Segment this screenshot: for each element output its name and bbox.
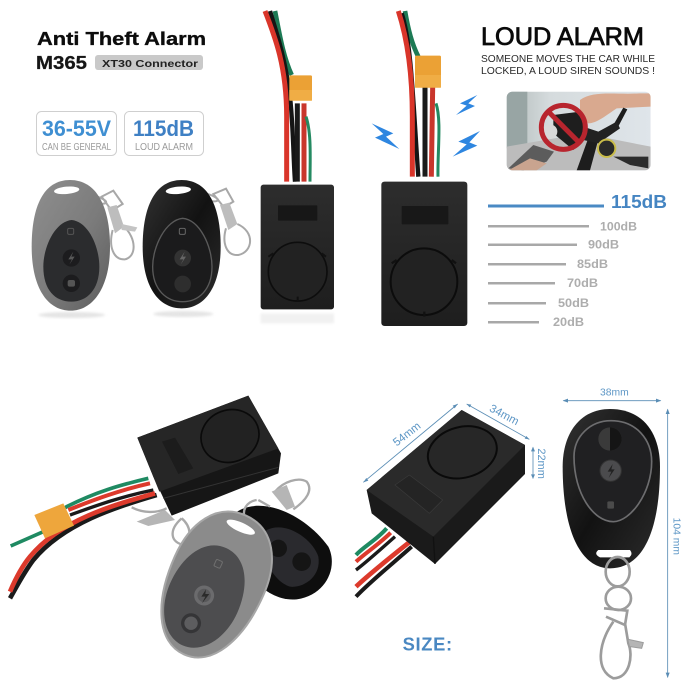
text block: alarm description: [481, 53, 655, 77]
chart: decibel comparison: [488, 192, 667, 329]
photo: scooter with prohibition sign: [507, 92, 651, 170]
icon: black key fob: [143, 180, 250, 317]
wires: [398, 11, 439, 177]
panel: top-left product intro: [32, 28, 250, 318]
text block: alarm description: LOCKED, A LOUD SIREN SOUNDS !: [481, 65, 655, 77]
bar: 100dB: 100dB: [600, 220, 637, 234]
dimension: 54mm: 54mm: [391, 420, 423, 449]
heading: size: SIZE:: [403, 634, 453, 655]
XT30 connector: [415, 56, 441, 88]
bar: 20dB: 20dB: [553, 315, 584, 329]
bar: 70dB: [488, 276, 598, 290]
wires: [356, 528, 412, 597]
panel: alarm unit with wires (left): [261, 11, 334, 323]
icon: lightning bolt top: [456, 95, 477, 115]
text block: alarm description: SOMEONE MOVES THE CAR WHILE: [481, 53, 655, 65]
dimension: 34mm: 34mm: [487, 403, 521, 428]
badge: loudness: LOUD ALARM: [135, 142, 193, 153]
bar: 85dB: 85dB: [577, 257, 608, 271]
bar: 115dB: [488, 192, 667, 212]
icon: black key fob with dimensions: [563, 409, 660, 568]
dimension: 104 mm: [666, 409, 681, 678]
bar: 90dB: [488, 238, 619, 252]
dimension: 104 mm: 104 mm: [670, 518, 681, 555]
bar: 50dB: 50dB: [558, 296, 589, 310]
bar: 20dB: [488, 315, 584, 329]
heading: loud alarm: LOUD ALARM: [481, 23, 644, 51]
icon: black fob behind: [226, 506, 332, 600]
dimension: 54mm: [363, 404, 458, 482]
bar: 70dB: 70dB: [567, 276, 598, 290]
alarm box: [261, 185, 334, 323]
wires: [265, 11, 310, 182]
XT30 connector: [289, 75, 312, 101]
bar: 115dB: 115dB: [611, 192, 667, 212]
title: Anti Theft Alarm: [37, 28, 206, 49]
panel: loud alarm unit with wires (right): [372, 11, 480, 326]
dimension: 38mm: 38mm: [600, 387, 629, 398]
icon: clasps: [132, 480, 309, 545]
bar: 50dB: [488, 296, 589, 310]
model name: M365: [36, 52, 87, 73]
icon: gray key fob: [32, 180, 137, 318]
panel: size diagram: [356, 387, 681, 678]
XT30 connector: [34, 503, 74, 538]
icon: lightning bolt left: [372, 123, 399, 149]
icon: gray fob front: [140, 496, 290, 674]
bar: 85dB: [488, 257, 608, 271]
wires: [10, 478, 157, 598]
dimension: 34mm: [467, 403, 529, 439]
icon: key ring and clasp: [601, 557, 643, 678]
badge: loudness: 115dB: [133, 116, 194, 141]
panel: product group photo: [10, 396, 332, 674]
dimension: 22mm: 22mm: [535, 448, 547, 479]
icon: lightning bolt bottom: [453, 131, 480, 157]
badge: voltage: [36, 112, 116, 156]
badge: voltage: CAN BE GENERAL: [42, 142, 111, 153]
badge: voltage: 36-55V: [42, 116, 111, 141]
alarm box: [137, 396, 281, 516]
alarm box: [367, 410, 525, 564]
connector tag: XT30 Connector: [102, 58, 198, 70]
dimension: 38mm: [563, 387, 661, 403]
badge: loudness: [124, 112, 204, 156]
alarm box: [381, 182, 467, 326]
connector tag: [95, 55, 203, 70]
bar: 90dB: 90dB: [588, 238, 619, 252]
